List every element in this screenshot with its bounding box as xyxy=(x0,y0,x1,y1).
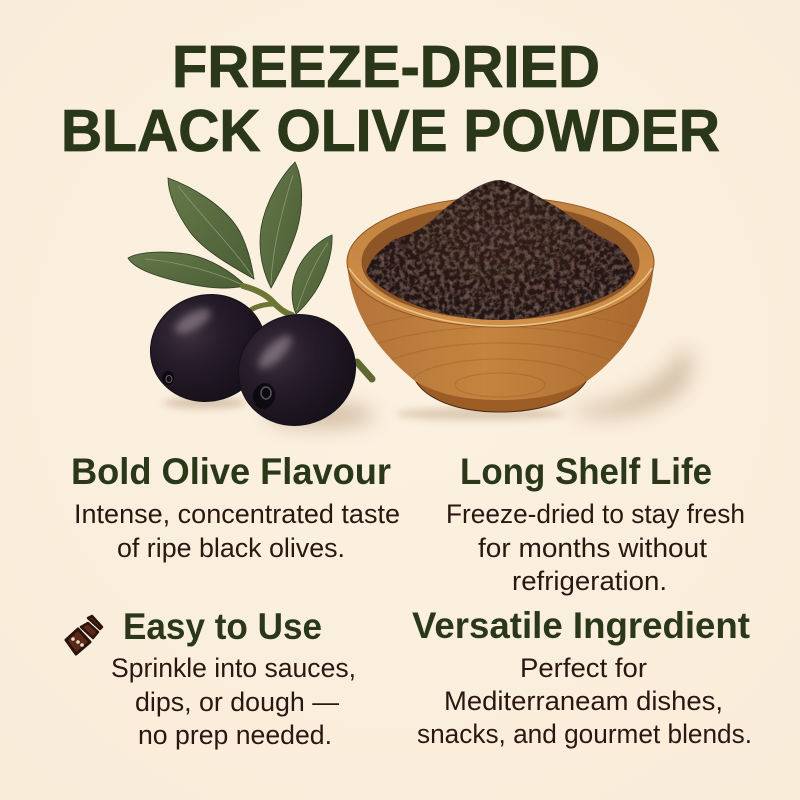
illustration: wooden bowl of black olive powder xyxy=(346,180,700,427)
block: Versatile Ingredient xyxy=(412,605,752,749)
title xyxy=(61,34,720,164)
bowl rim xyxy=(347,197,654,327)
icon: rear olive xyxy=(136,280,280,416)
bowl body xyxy=(347,262,654,400)
block: Long Shelf Life xyxy=(446,451,745,596)
heading: Long Shelf Life xyxy=(460,451,712,492)
icon: stems xyxy=(243,286,372,379)
body text: Intense, concentrated taste xyxy=(74,499,400,529)
block: Bold Olive Flavour xyxy=(71,451,400,563)
body text xyxy=(446,499,745,596)
body text: for months without xyxy=(478,533,708,563)
bowl inner wall xyxy=(362,204,640,320)
title: BLACK OLIVE POWDER xyxy=(61,98,720,164)
heading: Easy to Use xyxy=(123,606,322,647)
powder mound xyxy=(366,180,635,320)
icon: front olive xyxy=(223,298,371,442)
body text: Freeze-dried to stay fresh xyxy=(446,499,745,529)
icon: olive leaves xyxy=(128,162,332,314)
heading: Versatile Ingredient xyxy=(412,605,750,646)
bowl foot xyxy=(415,380,587,412)
body text: of ripe black olives. xyxy=(117,533,345,563)
wood grain rings xyxy=(366,316,636,398)
body text: no prep needed. xyxy=(138,720,332,750)
heading: Bold Olive Flavour xyxy=(71,451,391,492)
body text xyxy=(74,499,400,563)
icon: spice shaker xyxy=(66,616,102,654)
body text: Sprinkle into sauces, xyxy=(111,653,356,683)
body text: Mediterraneam dishes, xyxy=(444,686,723,716)
title: FREEZE-DRIED xyxy=(172,34,600,100)
body text: refrigeration. xyxy=(512,566,667,596)
body text: snacks, and gourmet blends. xyxy=(417,719,752,749)
body text: Perfect for xyxy=(520,653,647,683)
illustration: olive branch with two black olives xyxy=(128,162,375,442)
body text xyxy=(111,653,356,750)
body text: dips, or dough — xyxy=(135,687,339,717)
body text xyxy=(417,653,752,749)
block: Easy to Use xyxy=(111,606,356,750)
